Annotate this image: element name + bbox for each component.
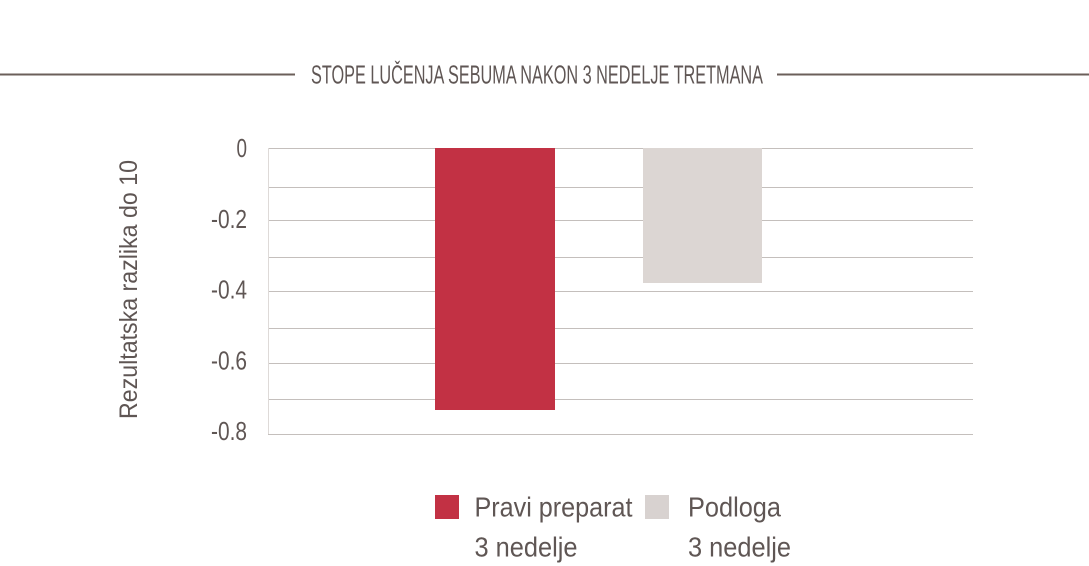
legend item: Pravi preparat xyxy=(435,492,633,562)
title: STOPE LUČENJA SEBUMA NAKON 3 NEDELJE TRETMANA xyxy=(311,60,763,90)
bar: Pravi preparat xyxy=(435,148,555,410)
y-axis labels xyxy=(211,133,247,446)
y-axis title: Rezultatska razlika do 10 xyxy=(115,160,143,419)
legend item: Podloga: 3 nedelje xyxy=(688,532,791,562)
legend item: Podloga xyxy=(645,492,791,562)
y-axis labels: -0.6 xyxy=(211,346,247,376)
legend item: Podloga: Podloga xyxy=(688,492,781,522)
legend item: Pravi preparat: Pravi preparat xyxy=(474,492,633,522)
legend item: Pravi preparat: 3 nedelje xyxy=(474,532,578,562)
bar chart xyxy=(211,133,973,446)
y-axis labels: 0 xyxy=(236,133,247,163)
bar: Podloga xyxy=(643,148,762,283)
y-axis labels: -0.4 xyxy=(211,274,247,304)
y-axis labels: -0.2 xyxy=(211,204,247,234)
y-axis labels: -0.8 xyxy=(211,416,247,446)
legend xyxy=(435,492,791,562)
